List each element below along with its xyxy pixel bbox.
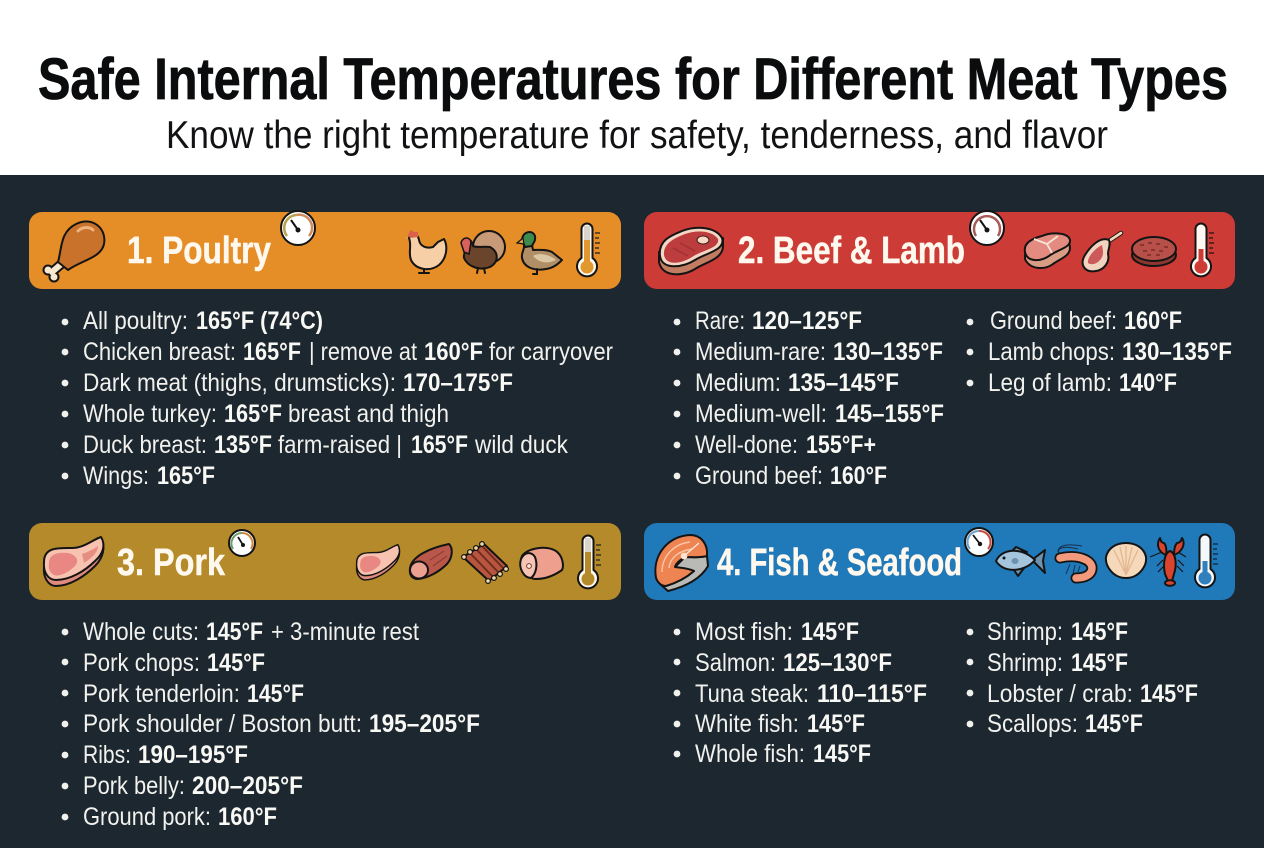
poultry header bar [29, 212, 621, 289]
pork list: 145°F [207, 649, 265, 677]
beef heading: 2. Beef & Lamb [738, 230, 965, 272]
pork list: 190–195°F [138, 741, 248, 769]
panel: fish and seafood [644, 523, 1235, 600]
pork list: Pork tenderloin: [83, 680, 240, 708]
icon: burger patty [1132, 237, 1176, 266]
icon: tenderloin [410, 544, 452, 579]
fish list, left column: Most fish: [695, 618, 793, 646]
poultry list: | remove at [309, 338, 417, 366]
icon: ribs [462, 542, 508, 583]
pork list: Pork belly: [83, 772, 185, 800]
icon: lobster [1150, 538, 1186, 586]
pork list: 145°F [247, 680, 304, 708]
poultry list: 170–175°F [403, 369, 513, 397]
fish list, right column: Lobster / crab: [987, 680, 1133, 708]
beef list, right column: 160°F [1124, 307, 1182, 335]
fish list, right column: 145°F [1140, 680, 1198, 708]
poultry list: breast and thigh [288, 400, 449, 428]
fish list, left column: 145°F [801, 618, 859, 646]
pork list: Pork chops: [83, 649, 200, 677]
icon: turkey [461, 231, 505, 273]
beef list, right column: Ground beef: [990, 307, 1117, 335]
poultry list: 165°F [243, 338, 301, 366]
pork list: 160°F [218, 803, 277, 831]
icon: pork chop [44, 537, 103, 586]
icon: steak [659, 228, 723, 274]
pork list: Ribs: [83, 741, 131, 769]
pork list [62, 618, 480, 831]
icon: thermometer [1195, 534, 1218, 587]
fish list, left column: Salmon: [695, 649, 776, 677]
icon: t-bone steak [1025, 233, 1070, 268]
poultry list: 165°F (74°C) [196, 307, 323, 335]
pork list: 195–205°F [369, 710, 480, 738]
beef list, left column: 145–155°F [835, 400, 944, 428]
icon: shrimp [1058, 545, 1092, 578]
beef list, left column: 130–135°F [833, 338, 943, 366]
panel: pork [29, 523, 621, 600]
fish header bar [644, 523, 1235, 600]
beef list, left column: Medium-rare: [695, 338, 826, 366]
beef list, right column [967, 307, 1232, 397]
beef list, left column: 160°F [830, 462, 887, 490]
fish list, right column: 145°F [1071, 618, 1128, 646]
beef list, left column: Well-done: [695, 431, 798, 459]
poultry list: Whole turkey: [83, 400, 217, 428]
fish list, left column: Whole fish: [695, 740, 805, 768]
icon: gauge [970, 211, 1004, 245]
icon: thermometer [577, 224, 600, 276]
poultry list: Duck breast: [83, 431, 207, 459]
poultry list: 135°F [214, 431, 272, 459]
pork header bar [29, 523, 621, 600]
panel: poultry [29, 211, 621, 289]
poultry list: wild duck [474, 431, 568, 459]
poultry list: Wings: [83, 462, 149, 490]
subtitle: Know the right temperature for safety, tenderness, and flavor [166, 114, 1108, 157]
icon: lamb chop [1083, 233, 1121, 271]
poultry list: 165°F [157, 462, 215, 490]
fish list, left column: White fish: [695, 710, 799, 738]
pork list: Pork shoulder / Boston butt: [83, 710, 362, 738]
beef header bar [644, 212, 1235, 289]
fish list, right column: Shrimp: [987, 618, 1063, 646]
beef list, left column: Rare: [695, 307, 745, 335]
beef list, right column: 130–135°F [1122, 338, 1232, 366]
fish list, right column: Scallops: [987, 710, 1078, 738]
poultry list: for carryover [489, 338, 613, 366]
poultry list: farm-raised | [278, 431, 402, 459]
beef list, left column: 155°F+ [806, 431, 876, 459]
fish list, left column: Tuna steak: [695, 680, 809, 708]
fish list, left column: 145°F [813, 740, 871, 768]
poultry heading: 1. Poultry [127, 230, 271, 272]
poultry list: 165°F [411, 431, 468, 459]
pork heading: 3. Pork [117, 542, 226, 584]
icon: gauge [281, 211, 315, 245]
beef list, left column: Medium-well: [695, 400, 827, 428]
fish list, right column: 145°F [1085, 710, 1143, 738]
fish list, right column: Shrimp: [987, 649, 1063, 677]
icon: thermometer [1191, 224, 1214, 276]
poultry list: Dark meat (thighs, drumsticks): [83, 369, 396, 397]
poultry list: 165°F [224, 400, 282, 428]
fish list, left column: 125–130°F [783, 649, 892, 677]
pork list: Ground pork: [83, 803, 211, 831]
poultry list: Chicken breast: [83, 338, 236, 366]
poultry list: All poultry: [83, 307, 188, 335]
icon: salmon steak [655, 535, 708, 591]
poultry list [62, 307, 613, 490]
icon: drumstick [44, 221, 104, 282]
beef list, left column: 135–145°F [788, 369, 899, 397]
fish list, left column: 145°F [807, 710, 865, 738]
beef list, left column: 120–125°F [752, 307, 862, 335]
icon: pork roast [520, 548, 563, 579]
icon: gauge [965, 528, 993, 556]
fish list, right column [967, 618, 1198, 738]
icon: duck [517, 232, 562, 274]
pork list: + 3-minute rest [271, 618, 419, 646]
fish list, left column: 110–115°F [817, 680, 927, 708]
beef list, right column: Leg of lamb: [988, 369, 1112, 397]
panel: beef and lamb [644, 211, 1235, 289]
icon: gauge [229, 530, 255, 556]
pork list: 200–205°F [192, 772, 303, 800]
fish list, left column [674, 618, 927, 768]
beef list, left column: Ground beef: [695, 462, 823, 490]
fish list, right column: 145°F [1071, 649, 1128, 677]
icon: fish [996, 547, 1045, 576]
beef list, left column [674, 307, 944, 490]
beef list, right column: 140°F [1119, 369, 1177, 397]
fish heading: 4. Fish & Seafood [717, 542, 962, 584]
beef list, right column: Lamb chops: [988, 338, 1115, 366]
icon: pork chop small [357, 545, 399, 580]
icon: thermometer [578, 536, 601, 588]
pork list: 145°F [206, 618, 263, 646]
poultry list: 160°F [424, 338, 483, 366]
pork list: Whole cuts: [83, 618, 199, 646]
icon: chicken [405, 230, 446, 273]
icon: scallop shell [1106, 543, 1146, 578]
beef list, left column: Medium: [695, 369, 781, 397]
